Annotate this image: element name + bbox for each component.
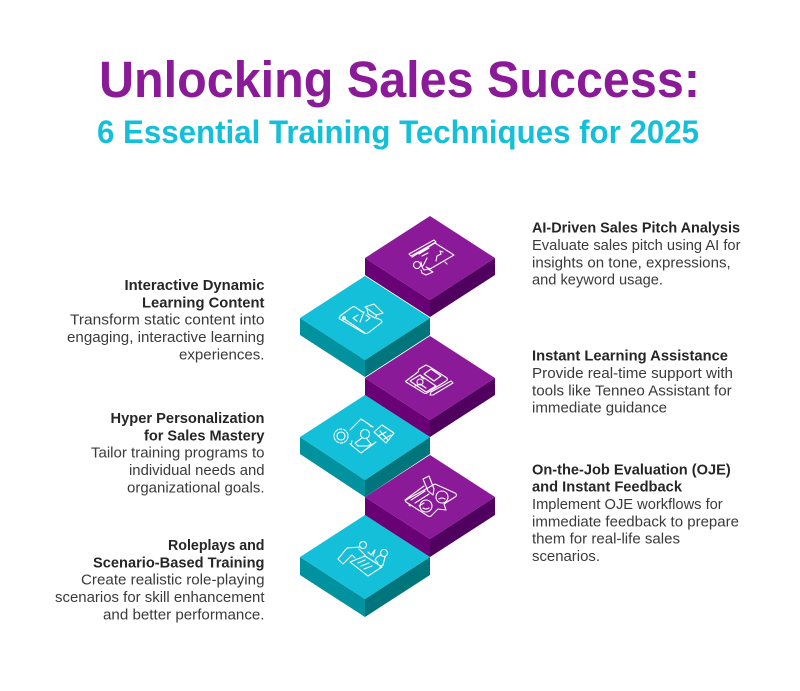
text block: hyper personalization: for Sales Mastery	[144, 427, 265, 444]
subtitle: 6 Essential Training Techniques for 2025	[97, 114, 699, 150]
text block: instant learning assistance	[532, 348, 733, 417]
text block: AI-driven sales pitch analysis: AI-Driven Sales Pitch Analysis	[532, 220, 740, 237]
text block: interactive dynamic learning content: Transform static content into	[70, 312, 264, 329]
text block: AI-driven sales pitch analysis	[532, 220, 741, 289]
text block: roleplays and scenario-based training: and better performance.	[103, 606, 264, 623]
text block: roleplays and scenario-based training: Roleplays and	[168, 537, 264, 554]
text block: on-the-job evaluation and instant feedback: them for real-life sales	[532, 531, 680, 548]
text block: hyper personalization: Tailor training programs to	[91, 445, 264, 462]
text block: roleplays and scenario-based training: scenarios for skill enhancement	[55, 589, 265, 606]
text block: interactive dynamic learning content: engaging, interactive learning	[67, 329, 264, 346]
icon: presentation board with presenter	[409, 240, 454, 275]
text block: interactive dynamic learning content: experiences.	[179, 346, 264, 363]
text block: hyper personalization: organizational goals.	[127, 479, 264, 496]
text block: instant learning assistance: immediate guidance	[532, 400, 667, 417]
text block: AI-driven sales pitch analysis: insights on tone, expressions,	[532, 254, 731, 271]
text block: hyper personalization: Hyper Personalization	[110, 410, 264, 427]
text block: roleplays and scenario-based training: Create realistic role-playing	[81, 572, 264, 589]
icon: code tablet and graduation cap	[339, 304, 383, 334]
icon: tablet with assistant and pencil	[406, 365, 453, 395]
text block: on-the-job evaluation and instant feedback: immediate feedback to prepare	[532, 513, 739, 530]
text block: AI-driven sales pitch analysis: Evaluate sales pitch using AI for	[532, 237, 741, 254]
text block: AI-driven sales pitch analysis: and keyword usage.	[532, 272, 663, 289]
text block: on-the-job evaluation and instant feedback: scenarios.	[532, 548, 600, 565]
text block: hyper personalization: individual needs and	[129, 462, 264, 479]
text block: on-the-job evaluation and instant feedback: Implement OJE workflows for	[532, 496, 723, 513]
text block: interactive dynamic learning content: Learning Content	[142, 294, 264, 311]
text block: interactive dynamic learning content	[67, 277, 264, 363]
icon: feedback card with faces and pencil	[405, 476, 456, 516]
block 6: roleplays	[300, 515, 430, 617]
text block: on-the-job evaluation and instant feedback: and Instant Feedback	[532, 479, 683, 496]
block 5: on-the-job evaluation	[365, 455, 495, 557]
text block: roleplays and scenario-based training: Scenario-Based Training	[93, 554, 264, 571]
block 3: instant learning assistance	[365, 336, 495, 437]
text block: instant learning assistance: tools like Tenneo Assistant for	[532, 382, 732, 399]
text block: instant learning assistance: Instant Learning Assistance	[532, 348, 728, 365]
icon: gear, person and book	[334, 419, 394, 453]
text block: instant learning assistance: Provide real-time support with	[532, 365, 733, 382]
text block: roleplays and scenario-based training	[55, 537, 265, 623]
text block: on-the-job evaluation and instant feedback	[532, 461, 739, 565]
text block: hyper personalization	[91, 410, 265, 496]
text block: interactive dynamic learning content: Interactive Dynamic	[124, 277, 264, 294]
block 4: hyper personalization	[300, 395, 430, 497]
text block: on-the-job evaluation and instant feedback: On-the-Job Evaluation (OJE)	[532, 461, 731, 478]
block 1: AI-driven pitch analysis	[365, 216, 495, 317]
title: Unlocking Sales Success:	[99, 51, 700, 108]
icon: roleplay people and desk	[338, 542, 388, 576]
block 2: interactive dynamic content	[300, 276, 430, 377]
